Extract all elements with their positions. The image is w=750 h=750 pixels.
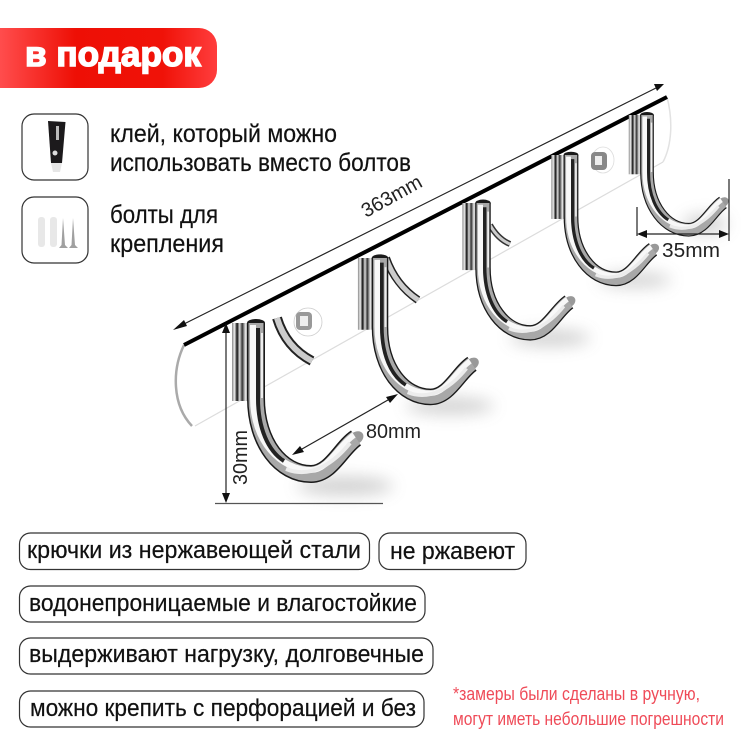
dimension: 30mm: 30mm bbox=[230, 430, 252, 485]
bolts description bbox=[110, 201, 224, 258]
measurement note bbox=[453, 684, 724, 729]
bolts description: крепления bbox=[110, 230, 224, 258]
icon: wall plugs and screws bbox=[22, 197, 88, 263]
hook 3 bbox=[462, 200, 578, 333]
feature pill: mounting: можно крепить с перфорацией и без bbox=[30, 695, 416, 722]
hook 2 bbox=[358, 254, 481, 397]
dimension: 363mm: 363mm bbox=[358, 171, 426, 222]
feature pill: no rust bbox=[379, 533, 526, 570]
product: hook rail diagram bbox=[176, 97, 731, 495]
feature pill: stainless steel: крючки из нержавеющей стали bbox=[27, 537, 361, 564]
hook reflections on plate bbox=[277, 225, 510, 361]
feature pill: waterproof: водонепроницаемые и влагостойкие bbox=[29, 590, 417, 617]
dimension: 35mm: 35mm bbox=[662, 240, 720, 262]
hook shadows bbox=[297, 215, 727, 495]
banner heading: в подарок bbox=[25, 35, 201, 74]
feature pill: durable: выдерживают нагрузку, долговечные bbox=[29, 641, 424, 668]
dimension: 363mm bbox=[173, 84, 664, 330]
glue description: использовать вместо болтов bbox=[110, 149, 411, 177]
hook 4 bbox=[551, 152, 661, 279]
gift item: glue bbox=[22, 114, 411, 180]
feature pill: no rust: не ржавеют bbox=[390, 538, 515, 565]
hook 1 bbox=[232, 319, 366, 474]
wall screw caps bbox=[294, 147, 614, 336]
dimension: 80mm bbox=[292, 394, 421, 455]
dimension: 35mm bbox=[637, 179, 729, 262]
bolts description: болты для bbox=[110, 201, 218, 229]
dimension: 30mm bbox=[215, 323, 383, 504]
dimension: 80mm: 80mm bbox=[366, 421, 421, 443]
icon: glue tube bbox=[22, 114, 88, 180]
glue description bbox=[110, 120, 411, 177]
mounting plate bbox=[176, 97, 671, 426]
hook 5 bbox=[629, 112, 731, 230]
glue description: клей, который можно bbox=[110, 120, 337, 148]
gift item: bolts bbox=[22, 197, 224, 263]
banner: в подарок bbox=[0, 28, 217, 88]
measurement note: *замеры были сделаны в ручную, bbox=[453, 684, 700, 704]
